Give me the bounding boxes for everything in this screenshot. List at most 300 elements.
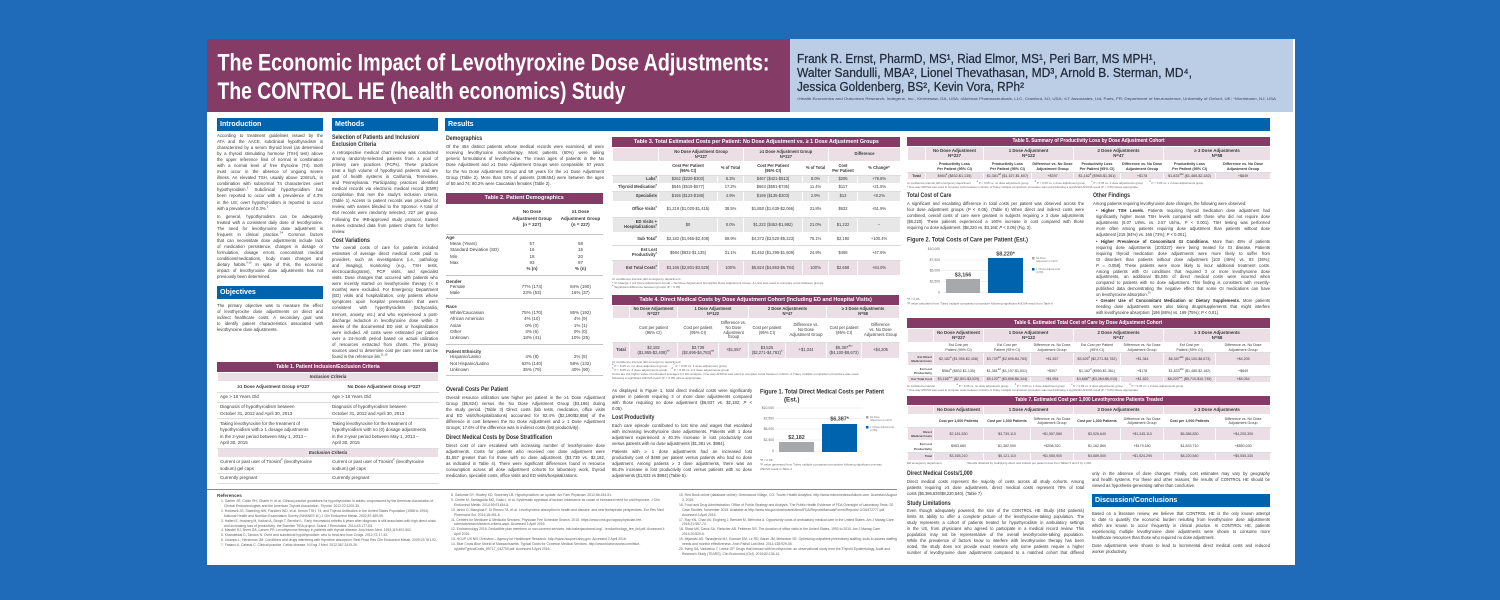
table 2: patient demographics: 0% (0) xyxy=(574,329,587,334)
table 6 footnotes xyxy=(907,383,1184,392)
figure 1: bar chart: $7,500 xyxy=(764,417,774,421)
table 2: patient demographics: 4% (10) xyxy=(524,316,540,321)
table 5: productivity loss: Productivity Loss xyxy=(992,162,1023,166)
table 4: direct medical costs by cohort xyxy=(612,295,900,358)
text: study limitations: population may not be representative of the overall levothyroxine-taking population. xyxy=(907,532,1084,537)
table 4: direct medical costs by cohort: 2 Dose Adjustments xyxy=(768,306,807,311)
table 4: direct medical costs by cohort: Cost per patient xyxy=(639,325,668,330)
table 4: direct medical costs by cohort: ($1,955-$2,408)ab xyxy=(637,349,670,354)
table 2: patient demographics: 0% (0) xyxy=(525,323,539,328)
table 4 footnotes: b P < 0.05 vs. 2 dose adjustments group d P < 0.05 vs. ≥ 3 dose adjustments group xyxy=(612,367,729,372)
table 2: patient demographics: 40% (90) xyxy=(571,367,590,372)
table 3: total estimated costs: $2,182 ($1,955-$2,408) xyxy=(667,236,709,241)
table 5: productivity loss: ≥ 3 Dose Adjustments xyxy=(1194,148,1240,153)
text: introduction: characterized by a serum thyroid level (as determined xyxy=(217,145,323,150)
text: study limitations: study represents a cohort of patients treated for hypothyroidism in ambulatory settings xyxy=(907,520,1084,525)
table 1: inclusion exclusion criteria: Inclusion Criteria xyxy=(310,374,346,379)
text: objectives: The primary objective was to measure the effect xyxy=(217,303,323,308)
table 5: productivity loss xyxy=(907,137,1271,179)
table 2: patient demographics: Age xyxy=(446,235,455,240)
references divider xyxy=(207,489,897,490)
subheading: total cost of care: Total Cost of Care xyxy=(907,192,951,199)
table 3: total estimated costs: $546 ($515-$577) xyxy=(672,184,704,189)
table 7: cost per 1,000 patients xyxy=(907,396,1271,460)
table 2: patient demographics: 18 xyxy=(529,254,534,259)
table 4: direct medical costs by cohort: N=47 xyxy=(783,311,792,316)
table 6: estimated total cost of care: Difference vs. No Dose xyxy=(1124,343,1160,347)
table 1: inclusion exclusion criteria: Taking levothyroxine for the treatment of xyxy=(220,421,300,426)
references column 3: 19. Mijatovic AS, Tanasijević MJ, Goonan EM, Le RD, Baum JM, Melanson SE. Optimizing outpatient phlebotomy staffing: tools to assess staffing needs and monitor effectiveness. Arch Pathol Lab Med. 2014;138:929-35. xyxy=(679,537,897,546)
text: cost variations: The overall costs of care for patients included xyxy=(332,245,438,250)
text: other findings: adjustments, an additional $5,046 of direct medical costs were incurred when xyxy=(1096,274,1270,279)
table 1: inclusion exclusion criteria: hypothyroidism with ≥ 1 dosage adjustments xyxy=(220,427,309,432)
text: cost variations: found in the reference list.11-19 xyxy=(332,353,387,359)
table 2: patient demographics: 2% (5) xyxy=(574,354,587,359)
table 7: cost per 1,000 patients: Direct xyxy=(923,430,932,434)
text: lost productivity: adjustment experienced a 40.3% increase in lost productivity cost xyxy=(612,435,752,440)
table 3: total estimated costs: $117 xyxy=(839,184,847,189)
figure 1: bar chart: $5,000 xyxy=(764,427,774,431)
text: direct medical costs by dose: as indicated in Table 4). There were significant differences found in resource xyxy=(446,461,605,466)
table 1: inclusion exclusion criteria: hypothyroidism with no (0) dosage adjustments xyxy=(332,427,426,432)
text: discussion and conclusions: healthcare resources than those who required no dose adjustment. xyxy=(1092,535,1215,540)
table 4: direct medical costs by cohort: (95% CI) xyxy=(690,330,706,334)
table 4: direct medical costs by cohort: Cost per patient xyxy=(753,325,781,330)
references column 3: 17. Ray KN, Chari AV, Engberg J, Bertolet M, Mehrotra A. Opportunity costs of ambulatory medical care in the United States. Am J Manag Care. 2015;21:567-74. xyxy=(679,518,895,526)
table 1: inclusion exclusion criteria: No Dose Adjustment Group n=227 xyxy=(348,384,420,389)
table 7: cost per 1,000 patients: Productivity xyxy=(914,446,932,450)
table 3: total estimated costs xyxy=(612,137,901,275)
references column 2: 10. Ianiro G, Mangiola F, Di Rienzo TA, et al. Levothyroxine absorption in health and disease, and new therapeutic perspectives. Eur Rev Med Pharmacol Sci. 2014;18:451-6. xyxy=(451,508,664,517)
table 6: estimated total cost of care: 2 Dose Adjustments xyxy=(1098,330,1140,335)
text: overall costs xyxy=(446,395,605,430)
figure 1: bar chart: 0 xyxy=(772,449,774,453)
text: discussion and conclusions: to date to quantify the economic burden resulting from levothyroxine dose adjustments xyxy=(1092,517,1270,522)
table 2: patient demographics: Max xyxy=(450,260,459,265)
table 3: total estimated costs: +21.5% xyxy=(872,184,886,189)
table 3: total estimated costs: 31.1% xyxy=(725,250,736,255)
table 2: patient demographics: Mean (Years) xyxy=(450,241,477,246)
text: total cost of care xyxy=(907,201,1084,230)
figure 2: bar chart: Adjustment (n=227) xyxy=(1036,260,1058,263)
table 5: productivity loss: $1,381ad ($1,157-$1,607) xyxy=(987,172,1028,178)
table 3: total estimated costs: $1,222 xyxy=(837,222,849,227)
text: figure 1 lead-in: As displayed in Figure 1, total direct medical costs were significantly xyxy=(612,388,752,393)
table 6: estimated total cost of care: Medical Costs xyxy=(911,359,932,363)
table 2: patient demographics: Unknown xyxy=(450,367,469,372)
table 4: direct medical costs by cohort: Cost per patient xyxy=(684,325,712,330)
table 1: inclusion exclusion criteria: in the 2-year period between May 1, 2013 – xyxy=(332,434,419,438)
table 3: total estimated costs: $1,218 ($1,020-$1,415) xyxy=(667,206,709,211)
text: other findings: more often among patients requiring dose adjustment than patients without dose xyxy=(1096,226,1270,231)
table 4 footnotes xyxy=(612,360,858,380)
subheading: cost variations: Cost Variations xyxy=(332,237,370,244)
text: introduction: must occur in the absence of ongoing severe xyxy=(217,169,323,174)
references column 2 xyxy=(451,493,665,551)
table 6: estimated total cost of care: +$849 xyxy=(1238,369,1248,373)
table 3: total estimated costs: – xyxy=(878,222,880,227)
text: other findings: compared to patients with no dose adjustment. This finding is consistent with recently- xyxy=(1096,280,1270,285)
table 2: patient demographics: 18% (41) xyxy=(523,335,541,340)
references column 1: 7. Fasano A, Catassi C. Clinical practice. Celiac disease. N Engl J Med. 2012;367:2419-26. xyxy=(221,543,358,547)
figure 2: bar chart: $7,500 xyxy=(930,258,940,262)
table 4: direct medical costs by cohort: +$1,557 xyxy=(726,347,741,352)
table 1: inclusion exclusion criteria: April 30, 2015 xyxy=(220,440,248,445)
table 3 footnotes xyxy=(612,277,824,289)
text: discussion and conclusions: which are known to occur frequently in clinical practice. In CONTROL HE, patients xyxy=(1092,523,1270,528)
text: selection of patients: primary care practices (PCPs). These practices xyxy=(332,162,438,167)
table 7: cost per 1,000 patients: $8,220,540 xyxy=(1181,454,1199,458)
text: other findings: adjustment [215 (84%) vs. 165 (73%); P < 0.001]. xyxy=(1096,232,1187,237)
table 6: estimated total cost of care: Difference vs. No Dose xyxy=(1034,343,1070,347)
table 5: productivity loss: Adjustment Group xyxy=(1126,166,1158,170)
references column 2: 8. Gaitonde DY, Rowley KD, Sweeney LB. Hypothyroidism: an update. Am Fam Physician. 2012;86:244-51. xyxy=(451,493,612,497)
text: direct medical costs by dose: $1,557 greater than for those with no dose adjustment. ($3,739 vs. $2,182, xyxy=(446,455,605,460)
table 2: patient demographics: 75% (170) xyxy=(522,310,542,315)
table 6: estimated total cost of care: $2,182a ($1,955-$2,408) xyxy=(939,356,978,361)
table 7: cost per 1,000 patients: $4,689,500 xyxy=(1088,454,1106,458)
text: introduction: illness. An elevated TSH, usually above 10mIU/L, in xyxy=(217,175,323,180)
table 6: estimated total cost of care: +$4,205 xyxy=(1236,357,1250,361)
references column 2: 13. HCUP US NIS Overview – Agency for Healthcare Research. http://www.hcupnet.ahrq.gov. Accessed 2 April 2016. xyxy=(451,537,627,541)
text: cost variations: months) were excluded. For Emergency Department xyxy=(332,287,438,292)
table 7: cost per 1,000 patients: Adjustment Group xyxy=(1128,421,1156,425)
text: cost variations: over a 24-month period based on actual utilization xyxy=(332,336,438,341)
table 3: total estimated costs: +47.6% xyxy=(872,250,886,255)
text: introduction: impact of levothyroxine dose adjustments has not xyxy=(217,268,323,273)
subheading: other findings: Other Findings xyxy=(1093,192,1130,199)
text: cost variations: estimates of average direct medical costs paid to xyxy=(332,251,438,256)
table 5: productivity loss: Per Patient (95% CI) xyxy=(937,166,972,170)
text: selection of patients: treat a high volume of hypothyroid patients and are xyxy=(332,168,438,173)
heading: discussion and conclusions xyxy=(1092,494,1270,507)
figure 2: bar chart: No Dose xyxy=(1036,257,1046,260)
table 2: patient demographics: 1% (1) xyxy=(574,323,587,328)
table 2: patient demographics: Adjustment Group xyxy=(512,216,552,221)
references column 3: 16. Food and Drug Administration. Office of Public Strategy and Analysis. The Public Health Evidence of FDA Oversight of Laboratory Tests: 20 Case Studies. November 2015. Available at http://www.fda.gov/downloads/AboutFDA/ReportsManualsForms/Reports/ UCM472777.pdf. Accessed 3 April 2016. xyxy=(679,503,893,517)
subheading: selection of patients: Selection of Patients and Inclusion/ xyxy=(332,134,420,141)
heading: objectives xyxy=(217,286,323,298)
table 6: estimated total cost of care: +$5,054 xyxy=(1236,377,1250,381)
figure 1: bar chart: $2,182 xyxy=(788,435,805,441)
table 7: cost per 1,000 patients: +$5,055,330 xyxy=(1233,454,1253,458)
table 6: estimated total cost of care: +$1,522 xyxy=(1135,377,1149,381)
table 5: productivity loss: Adjustment Group xyxy=(1036,166,1069,170)
table 1: inclusion exclusion criteria xyxy=(217,362,439,484)
text: objectives: to identify patient characteristics associated with xyxy=(217,321,323,326)
table 3: total estimated costs: +84.0% xyxy=(872,265,886,270)
table 6: estimated total cost of care: N=122 xyxy=(1022,334,1035,340)
table 7: cost per 1,000 patients: $6,386,830 xyxy=(1181,432,1199,436)
table 6: estimated total cost of care: $6,387abc ($4,100-$8,673) xyxy=(1169,356,1210,361)
table 3: total estimated costs: 4.9% xyxy=(726,193,735,198)
references column 3: 20. Irving SA, Vadiveloo T, Leese GP. Drugs that interact with levothyroxine: an observational study from the Thyroid Epidemiology, Audit and Research Study (TEARS). Clin Endocrinol (Oxf). 2015;82:136-41. xyxy=(679,547,890,556)
table 2: patient demographics: 77% (174) xyxy=(522,284,542,289)
subheading: direct medical costs by dose: Direct Medical Costs by Dose Stratification xyxy=(446,434,552,441)
heading: methods: Methods xyxy=(335,120,364,128)
table 3 footnotes: a Significant difference between groups (P < 0.05) xyxy=(612,284,680,289)
table 5: productivity loss: No Dose Adjustment xyxy=(933,148,976,153)
table 3: total estimated costs: $2,658 xyxy=(837,265,849,270)
subheading: selection of patients xyxy=(332,134,420,148)
table 2: patient demographics: Not Hispanic/Latino xyxy=(450,361,489,366)
text: selection of patients: medical records via electronic medical record (EMR) xyxy=(332,186,438,191)
table 4 footnotes: following a significant ANOVA result (P < 0.05) where appropriate. xyxy=(612,376,702,380)
table 4: direct medical costs by cohort: N=227 xyxy=(647,311,660,316)
table 3: total estimated costs: +100.4% xyxy=(871,236,887,241)
author panel xyxy=(790,39,1293,112)
table 7: cost per 1,000 patients: $1,162,860 xyxy=(1088,444,1106,448)
table 2: patient demographics: 15 xyxy=(578,247,583,252)
text: study limitations continued: and health systems. For these and other reasons, the results of CONTROL HE should be xyxy=(1092,477,1270,482)
text: other findings: Among patients with GI conditions that required 3 or more levothyroxine dose xyxy=(1096,269,1270,274)
table 4: direct medical costs by cohort: 1 Dose Adjustment xyxy=(695,306,731,311)
table 3: total estimated costs: Office Visitsa xyxy=(632,206,657,211)
subheading: overall costs: Overall Costs Per Patient xyxy=(446,386,508,393)
text: demographics: for the No Dose Adjustment Group and 58 years for the ≥1 Dose Adjustment xyxy=(446,169,604,174)
references column 3: 15. Red Book online (database online). Greenwood Village, CO: Truven Health Analytics. http://www.micromedexsolutions.com. Accessed August 3, 2015. xyxy=(679,493,897,502)
table 6: estimated total cost of care: $984a ($832-$1,135) xyxy=(942,368,975,373)
heading: introduction xyxy=(217,118,323,130)
references column 1: 2. Hollowell JG, Staehling NW, Flanders WD, et al. Serum TSH, T4, and Thyroid Antibodies in the United States Population (1988 to 1994): National Health and Nutrition Examination Survey (NHANES III.) J Clin Endocrinol Metab. 2002;87:489-99. xyxy=(221,509,429,518)
table 6: estimated total cost of care: +$1,557 xyxy=(1045,357,1059,361)
figure 1: bar chart: No Dose xyxy=(870,416,880,419)
figure 2: bar chart: $10,000 xyxy=(928,247,940,251)
table 1: inclusion exclusion criteria: October 31, 2012 and April 30, 2013 xyxy=(332,410,404,416)
table 7: cost per 1,000 patients: Total xyxy=(925,454,932,458)
table 1: inclusion exclusion criteria: Age > 18 Years Old xyxy=(220,394,259,399)
text: lost productivity: Patients with ≥ 1 dose adjustments had an increased lost xyxy=(612,449,752,454)
heading: methods xyxy=(332,118,438,130)
references column 1: 1. Garber JR, Cobin RH, Gharib H, et al. Clinical practice guidelines for hypothyroidism in adults: cosponsored by the American Association of Clinical Endocrinologists and the American Thyroid Association. Thyroid. 2012;22:1200-35. xyxy=(221,499,433,508)
text: direct medical costs by dose: Direct cost of care escalated with increasing number of levothyroxine dose xyxy=(446,443,605,448)
table 6: estimated total cost of care: $1,162d ($960-$1,361) xyxy=(1079,368,1115,373)
figure 1: bar chart: (n=58) xyxy=(870,429,877,432)
table 4: direct medical costs by cohort: Total xyxy=(616,347,626,352)
text: total cost of care: combined, overall costs of care were greatest in subjects requiring ≥ 3 dose adjustments xyxy=(907,213,1084,218)
table 2: patient demographics: Min xyxy=(450,254,457,259)
table 4: direct medical costs by cohort: Adjustment Group xyxy=(864,332,897,337)
table 2: patient demographics: Standard Deviation (SD) xyxy=(450,247,499,252)
text: overall costs: Group ($5,824) versus the No Dose Adjustment Group ($3,166) during xyxy=(446,401,605,406)
table 7: cost per 1,000 patients: +$1,557,580 xyxy=(1042,432,1062,436)
table 7: cost per 1,000 patients: $3,739,110 xyxy=(998,432,1016,436)
text: introduction: the upper reference limit of normal in combination xyxy=(217,157,323,162)
table 3: total estimated costs: No Dose Adjustment Group xyxy=(674,149,728,154)
text: direct medical costs by dose: consumption across all dose adjustment cohorts for laboratory work, thyroid xyxy=(446,467,605,472)
table 3: total estimated costs: N=227 xyxy=(695,154,707,158)
table 7: cost per 1,000 patients: $983,680 xyxy=(951,444,966,448)
table 3: total estimated costs: Hospitalizationsa xyxy=(624,224,657,229)
table 6: estimated total cost of care: +$1,344 xyxy=(1135,357,1149,361)
subheading: direct medical costs per 1,000: Direct Medical Costs/1,000 xyxy=(907,470,973,477)
table 6: estimated total cost of care: N=47 xyxy=(1113,334,1124,340)
text: other findings: published data demonstrating the negative effect that some GI medications can have xyxy=(1096,286,1270,291)
text: other findings: on levothyroxine absorption.20 xyxy=(1096,292,1151,297)
table 7: cost per 1,000 patients: Adjustment Group xyxy=(1229,421,1258,425)
text: study limitations: Even though adequately powered, the size of the CONTROL HE Study (454 patients) xyxy=(907,508,1084,513)
text: overall costs: and ED visits/hospitalizations) accounted for 82.4% ($2,190/$2,658) of the xyxy=(446,413,605,418)
table 2: patient demographics: (n = 227) xyxy=(523,222,541,227)
text: cost variations: of resources extracted from charts. The primary xyxy=(332,342,438,347)
table 6: estimated total cost of care: Patient (95% CI) xyxy=(945,348,972,352)
text: overall costs: Groups; 17.6% of the difference was in indirect costs (lost productivity). xyxy=(446,425,580,430)
figure 2: bar chart: $5,000 xyxy=(930,269,940,273)
text: demographics: generic formulations of levothyroxine. The mean ages of patients in the No xyxy=(446,156,604,161)
text: direct medical costs per 1,000: patients requiring ≥3 dose adjustments, direct medical costs represent 78% of total xyxy=(907,485,1084,490)
table 7: cost per 1,000 patients: Cost per 1,000 Patients xyxy=(1077,419,1117,423)
author panel: Walter Sandulli, MBA², Lionel Thevathasan, MD³, Arnold B. Sterman, MD⁴, xyxy=(797,66,1192,80)
table 2: patient demographics: African American xyxy=(450,316,484,321)
table 5: productivity loss: 2 Dose Adjustments xyxy=(1098,148,1140,153)
table 3: total estimated costs: $5,824 ($4,863-$6,784) xyxy=(752,265,794,270)
table 5: productivity loss: Productivity Loss xyxy=(1082,162,1112,166)
table 7: cost per 1,000 patients: Difference vs. No Dose xyxy=(1034,417,1070,421)
table 1: inclusion exclusion criteria: in the 2-year period between May 1, 2013 – xyxy=(220,434,307,438)
text: selection of patients: A retrospective medical chart review was conducted xyxy=(332,150,438,155)
text: objectives xyxy=(217,303,323,332)
table 4 footnotes: Costs are the higher value of estimated averages for this analysis. One-way ANOVA was used to compare costs between cohorts. A Tukey multiple comparison procedure was used xyxy=(612,372,858,376)
table 3: total estimated costs: ≥1 Dose Adjustment Group xyxy=(760,149,812,154)
table 5: productivity loss: Difference vs. No Dose xyxy=(1032,162,1073,166)
table 4: direct medical costs by cohort: Table 4. Direct Medical Costs by Dose Adjustment Cohort (Including ED and Hospital Visits) xyxy=(639,297,872,303)
table 1: inclusion exclusion criteria: October 31, 2012 and April 30, 2013 xyxy=(220,410,292,416)
table 7: cost per 1,000 patients: $3,165,210 xyxy=(950,454,968,458)
table 3: total estimated costs: 68.9% xyxy=(725,236,736,241)
table 2: patient demographics: 58% (132) xyxy=(570,361,591,366)
table 3: total estimated costs: $0 xyxy=(686,222,690,227)
references column 2: 9. Centre M, Santaguida MG, Gatto I, et al. Systematic appraisal of lactose intolerance as cause of increased need for oral thyroxine. J Clin Endocrinol Metab. 2014;99:E1454-8. xyxy=(451,498,660,507)
table 5: productivity loss: +$397 xyxy=(1047,174,1058,178)
figure 2: bar chart: *P value calculated from Tukey multiple comparison procedure following significant ANOVA result from Table 6 xyxy=(907,302,1053,306)
text: selection of patients: 454 records were randomly selected, 227 per group. xyxy=(332,210,438,215)
table 2: patient demographics: 4% (9) xyxy=(574,316,587,321)
text: other findings: • Greater Use of Concomitant Medication or Dietary Supplements. More patients xyxy=(1096,298,1270,303)
table 4: direct medical costs by cohort: ≥ 3 Dose Adjustments xyxy=(842,306,884,311)
text: selection of patients: and Pennsylvania. Participating practices identified xyxy=(332,180,438,185)
table 2: patient demographics: Female xyxy=(450,284,465,289)
table 6: estimated total cost of care: Patient (95% CI) xyxy=(994,348,1020,352)
table 4: direct medical costs by cohort: $3,739 xyxy=(692,345,704,350)
text: introduction: According to treatment guidelines issued by the xyxy=(217,133,323,138)
text: total cost of care: four dose adjustment groups (P < 0.05). (Table 6) When direct and indirect costs were xyxy=(907,207,1084,212)
table 2: patient demographics: No Dose xyxy=(523,209,541,214)
table 3: total estimated costs: $1,850 ($1,635-$2,066) xyxy=(752,206,794,211)
figure 1: bar chart: *P value generated from Tukey multiple comparison procedure following significant one-way xyxy=(760,462,882,466)
text: objectives: of levothyroxine dose adjustments on direct and xyxy=(217,309,323,314)
text: introduction: in the US; overt hypothyroidism is reported to occur xyxy=(217,200,323,205)
table 6: estimated total cost of care: $3,739ad ($2,695-$4,783) xyxy=(987,356,1027,361)
text: total cost of care: A significant and escalating difference in total costs per patient was observed across the xyxy=(907,201,1084,206)
references column 2: 14. Blue Cross Blue Shield of Massachusetts. Typical Costs for Common Medical Services. http://www.bluecrossma.com/blue-iq/pdfs/TypicalCosts_89717_042709.pdf. Accessed 5 April 2016. xyxy=(451,542,640,551)
table 5: productivity loss: 1 Dose Adjustment xyxy=(1009,148,1048,153)
table 1: inclusion exclusion criteria: sodium) gel caps xyxy=(332,466,366,470)
text: selection of patients: part of health systems in California, Tennessee, xyxy=(332,174,438,179)
table 3: total estimated costs: 38.5% xyxy=(725,206,736,211)
table 3: total estimated costs: (95% CI) xyxy=(680,168,696,172)
table 2: patient demographics: 57 xyxy=(529,241,534,246)
text: cost variations: symptoms upon hospital presentation that were xyxy=(332,299,438,304)
table 5: productivity loss: N=47 xyxy=(1113,152,1124,158)
text: other findings: requiring dose adjustments (103/227) were being treated for GI disease. Patients xyxy=(1096,245,1270,250)
table 5: productivity loss: N=227 xyxy=(948,152,961,158)
table 3: total estimated costs: 0.0% xyxy=(726,222,735,227)
table 3: total estimated costs: $467 ($421-$513) xyxy=(757,176,789,181)
table 3: total estimated costs: Table 3. Total Estimated Costs per Patient: No Dose Adjustment vs. ≥ 1 Dose Adjustment Groups xyxy=(633,139,879,145)
text: cost variations: discharge reduction in levothyroxine dose within 3 xyxy=(332,318,438,323)
table 4: direct medical costs by cohort: ($2,695-$4,783)ad xyxy=(682,349,714,354)
table 7: cost per 1,000 patients: Cost per 1,000 Patients xyxy=(939,419,978,423)
text: lost productivity: versus patients with no dose adjustments ($1,381 vs. $984). xyxy=(612,441,725,446)
text: objectives: levothyroxine dose adjustments. xyxy=(217,327,278,332)
table 1: inclusion exclusion criteria: Age > 18 Years Old xyxy=(332,394,371,399)
text: selection of patients: among randomly-selected patients from a pool of xyxy=(332,156,438,161)
figure 1: bar chart: Figure 1. Total Direct Medical Costs per Patient xyxy=(760,388,884,396)
text: cost variations: were recently started on levothyroxine therapy (< 6 xyxy=(332,281,438,286)
table 7: cost per 1,000 patients: $1,833,710 xyxy=(1181,444,1199,448)
table 7: cost per 1,000 patients: Difference vs. No Dose xyxy=(1124,417,1160,421)
table 5: productivity loss: Per Patient (95% CI) xyxy=(990,166,1025,170)
text: cost variations: (ED) visits and hospitalization, only patients whose xyxy=(332,293,438,298)
table 3: total estimated costs: $1,222 ($452-$1,992) xyxy=(753,222,793,227)
table 5: productivity loss: Difference vs. No Dose xyxy=(1223,162,1263,166)
table 2: patient demographics: % (n) xyxy=(526,266,538,271)
text: introduction: been reported to occur with a prevalence of 4.3% xyxy=(217,193,323,198)
table 7: cost per 1,000 patients: +$1,524,290 xyxy=(1132,454,1152,458)
figure 1: bar chart: (Est.) xyxy=(784,396,799,404)
table 3: total estimated costs: $2,190 xyxy=(837,236,849,241)
table 6: estimated total cost of care: Adjustment Group xyxy=(1229,348,1258,352)
text: discussion and conclusions: worker productivity. xyxy=(1092,549,1127,554)
table 3: total estimated costs: Thyroid Medicationa xyxy=(618,184,657,189)
text: introduction: conditions/medications, body mass changes and xyxy=(217,256,323,261)
table 5: productivity loss: N=122 xyxy=(1022,152,1035,158)
text: introduction: hypothyroidism.1 Subclinical hypothyroidism has xyxy=(217,187,323,192)
subheading: study limitations: Study Limitations xyxy=(907,500,951,507)
text: total cost of care: ($8,220). These patients experienced a 160% increase in cost compared with those xyxy=(907,219,1084,224)
table 2: patient demographics: Gender xyxy=(446,279,462,284)
table 3: total estimated costs: $4,372 ($3,520-$5,223) xyxy=(752,236,794,241)
table 4: direct medical costs by cohort: (95% CI) xyxy=(836,330,852,334)
poster background xyxy=(207,39,1295,565)
table 2: patient demographics: % (n) xyxy=(575,266,586,271)
text: study limitations: noted, the study does not provide exact reasons why some patients require a higher xyxy=(907,544,1084,549)
table 3: total estimated costs: 17.2% xyxy=(725,184,736,189)
text: selection of patients: Following the IRB-approved study protocol, trained xyxy=(332,217,438,222)
table 3: total estimated costs: Cost Per Patient xyxy=(672,163,704,168)
text: demographics xyxy=(446,144,604,186)
text: introduction: previously been determined. xyxy=(217,274,270,279)
table 6: estimated total cost of care: Productivity xyxy=(914,371,932,375)
text: selection of patients: compilation that met the study's inclusion criteria. xyxy=(332,192,438,197)
table 6: estimated total cost of care: +$178 xyxy=(1137,369,1147,373)
table 6: estimated total cost of care: Est Direct xyxy=(918,355,932,359)
text: lost productivity: adjustment. Among patients ≥ 3 dose adjustments, there was an xyxy=(612,461,752,466)
text: direct medical costs per 1,000: Direct medical costs represent the majority of costs across all study cohorts. Among xyxy=(907,479,1084,484)
text: selection of patients: review. xyxy=(332,229,345,234)
table 3: total estimated costs: 24.9% xyxy=(810,250,821,255)
table 4: direct medical costs by cohort: N=58 xyxy=(858,311,868,316)
table 5: productivity loss: Productivity Loss xyxy=(939,162,970,166)
text: discussion and conclusions: Dose adjustments were shown to lead to incremental direct medical costs and reduced xyxy=(1092,543,1270,548)
text: other findings: significantly higher mean TSH levels compared with those who did not require dose xyxy=(1096,214,1270,219)
table 3 footnotes: CI confidence interval, ED emergency department xyxy=(612,277,680,281)
text: study limitations continued xyxy=(1092,471,1270,488)
table 6: estimated total cost of care: Est Lost xyxy=(920,367,932,371)
text: introduction: The need for levothyroxine dose adjustment is xyxy=(217,226,323,231)
table 6: estimated total cost of care: ≥ 3 Dose Adjustments xyxy=(1194,330,1240,335)
table 2: patient demographics: 35% (79) xyxy=(523,367,541,372)
